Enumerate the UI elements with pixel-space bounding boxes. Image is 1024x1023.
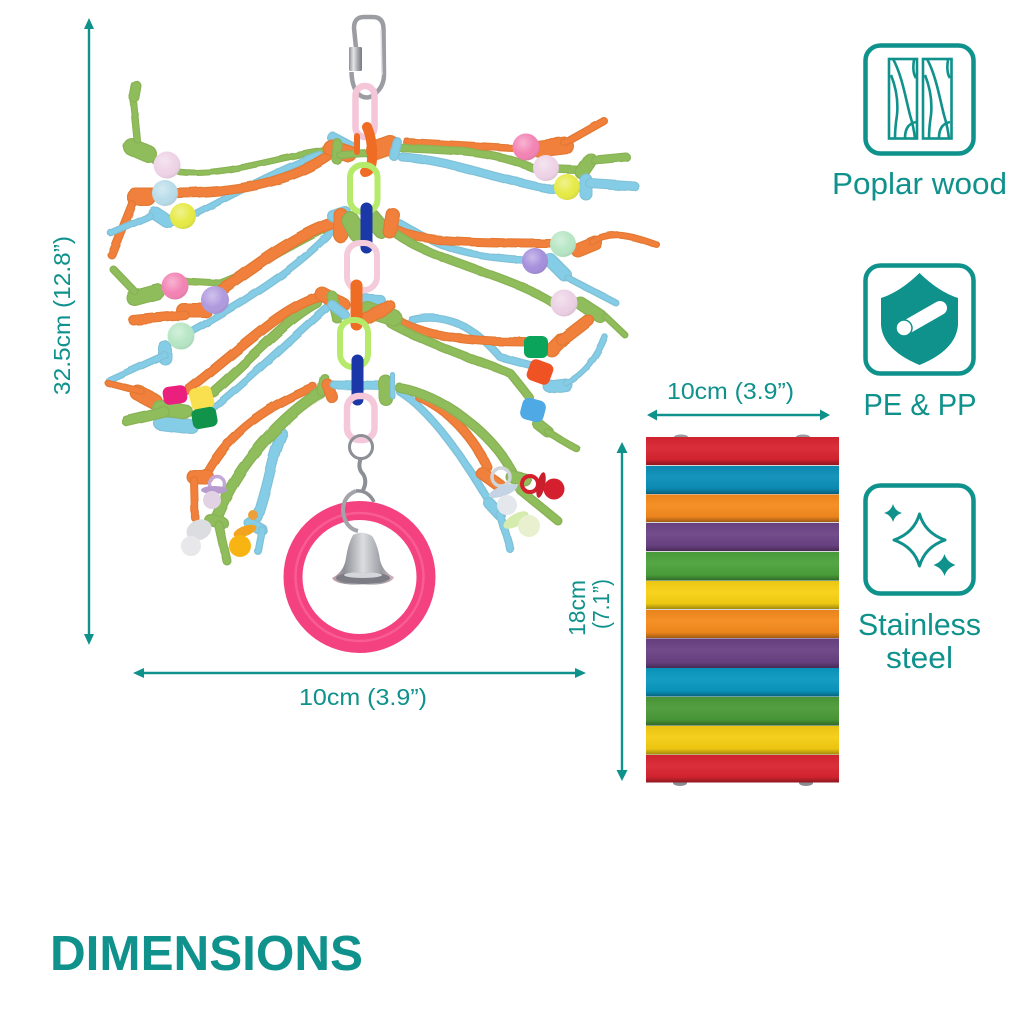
toy photo: hanging foraging toy [108,17,657,644]
beads [152,134,580,430]
label: ladder height: (7.1”) [588,579,614,629]
paper strands and knots [108,86,657,561]
level 2 strands [110,223,657,380]
icon: stainless steel sparkles [866,486,974,594]
label: toy width: 10cm (3.9”) [299,684,427,710]
label: ladder height: 18cm [564,580,590,636]
label: stainless steel: Stainless [858,607,981,642]
level 4 strands [194,387,558,561]
steel swivel [350,436,374,502]
bell [332,533,394,585]
pink ring [293,510,426,644]
level 1 strands [111,86,634,255]
title: DIMENSIONS [50,927,363,981]
centre knots [322,138,397,399]
arrow: toy width [133,668,586,678]
label: ladder height [564,579,614,636]
arrow: ladder width [647,410,830,420]
arrow: ladder height [616,442,628,781]
ladder photo: rainbow wooden bars [646,434,839,786]
label: toy height: 32.5cm (12.8”) [49,236,75,395]
carabiner [349,17,384,98]
label: stainless steel [858,607,981,675]
label: PE and PP: PE & PP [864,387,976,422]
pacifier charms [181,468,564,557]
label: stainless steel: steel [886,640,953,675]
level 3 strands [108,297,605,449]
steel jump ring over pink ring [343,491,358,531]
arrow: toy height [84,18,94,645]
icon: PE and PP shield [866,266,974,374]
label: ladder width: 10cm (3.9”) [667,378,794,404]
icon: poplar wood [866,46,974,154]
label: poplar wood: Poplar wood [832,166,1007,201]
chain links [340,86,378,440]
